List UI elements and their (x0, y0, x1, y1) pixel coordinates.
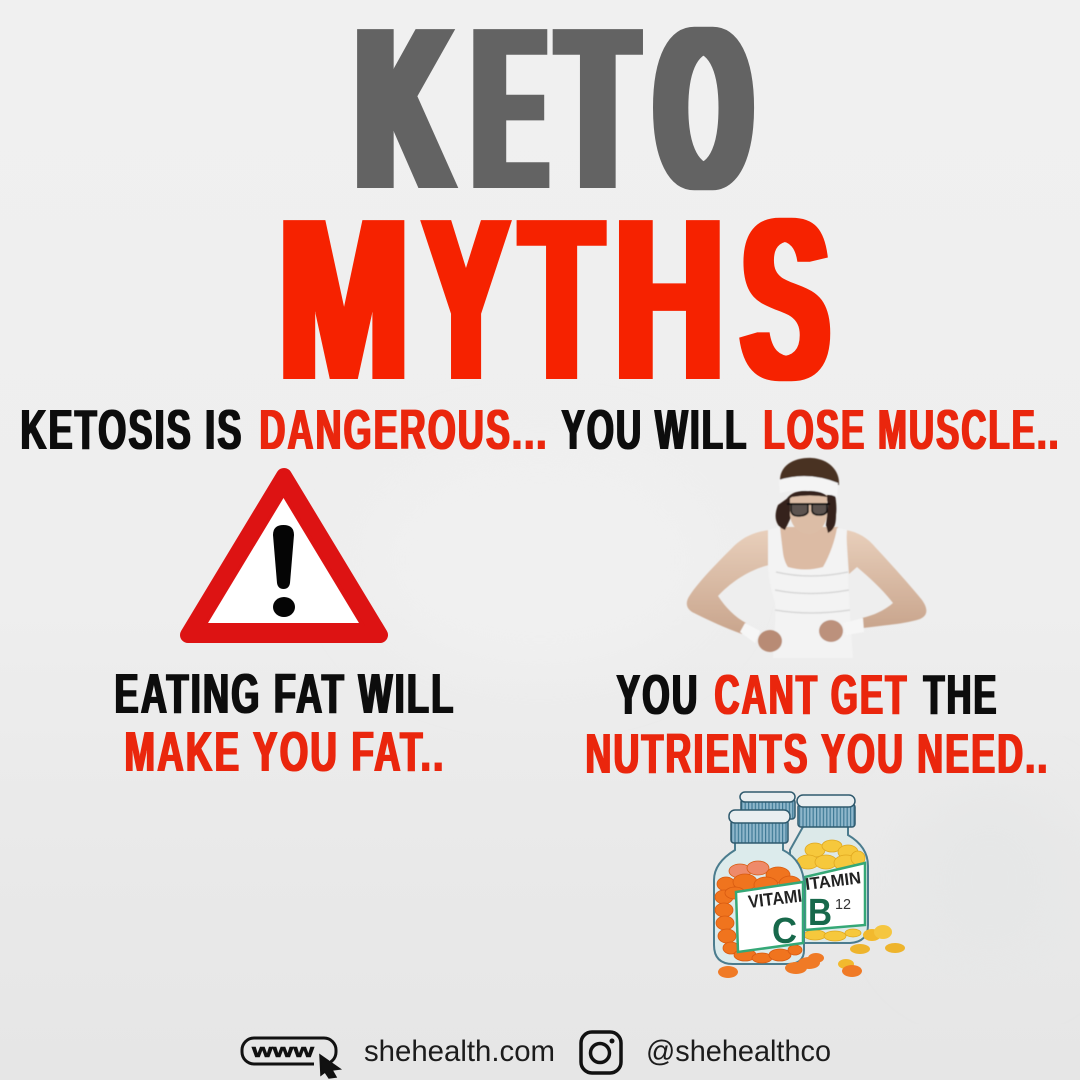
text: you cant get the nutrients you need: YOU (616, 663, 700, 727)
icon: www cursor (242, 1038, 340, 1078)
left arm (687, 530, 769, 634)
icon: warning triangle (188, 476, 380, 635)
title: MYTHS: H (615, 170, 724, 428)
text: eating fat will make you fat (114, 662, 456, 784)
myth row: dangerous and lose muscle: YOU WILL (562, 398, 748, 462)
singlet (768, 527, 853, 658)
myth row: dangerous and lose muscle (20, 398, 1060, 462)
title: MYTHS: T (521, 170, 602, 428)
vitamin B12 bottle: ITAMIN (804, 868, 862, 894)
vitamin C bottle: VITAMI (747, 886, 803, 912)
myth row: dangerous and lose muscle: DANGEROUS... (260, 398, 548, 462)
headband (779, 476, 838, 497)
footer contact bar (242, 1032, 831, 1078)
text: you cant get the nutrients you need: THE (924, 663, 998, 727)
vitamin C bottle: C (772, 910, 797, 951)
title: MYTHS: S (741, 170, 829, 428)
wristbands (740, 618, 864, 643)
loose pills (718, 925, 905, 978)
instagram handle: @shehealthco (646, 1035, 831, 1068)
hair back (776, 495, 836, 533)
vitamin B12 bottle: B (808, 892, 832, 934)
right arm (846, 530, 926, 628)
illustration: vitamin bottles (714, 792, 905, 978)
icon: www cursor: www (251, 1041, 315, 1061)
glasses (791, 504, 827, 516)
myth row: dangerous and lose muscle: KETOSIS IS (20, 398, 243, 462)
text: you cant get the nutrients you need: CANT GET (714, 663, 908, 727)
back bottle cap (740, 792, 795, 819)
text: eating fat will make you fat: MAKE YOU FAT.. (124, 720, 446, 784)
illustration: skinny man flexing (687, 458, 926, 658)
chest (780, 527, 838, 570)
text: you cant get the nutrients you need (586, 663, 1050, 786)
vitamin B12 bottle: 12 (835, 896, 851, 913)
title: MYTHS: Y (424, 170, 508, 428)
text: eating fat will make you fat: EATING FAT WILL (114, 662, 456, 726)
website: shehealth.com (364, 1035, 555, 1068)
title: MYTHS: M (279, 170, 409, 428)
fists (758, 630, 782, 652)
head (790, 495, 827, 534)
hair top (780, 458, 839, 485)
vitamin B12 bottle (790, 795, 868, 943)
icon: instagram (581, 1032, 621, 1073)
vitamin C bottle (714, 810, 804, 964)
